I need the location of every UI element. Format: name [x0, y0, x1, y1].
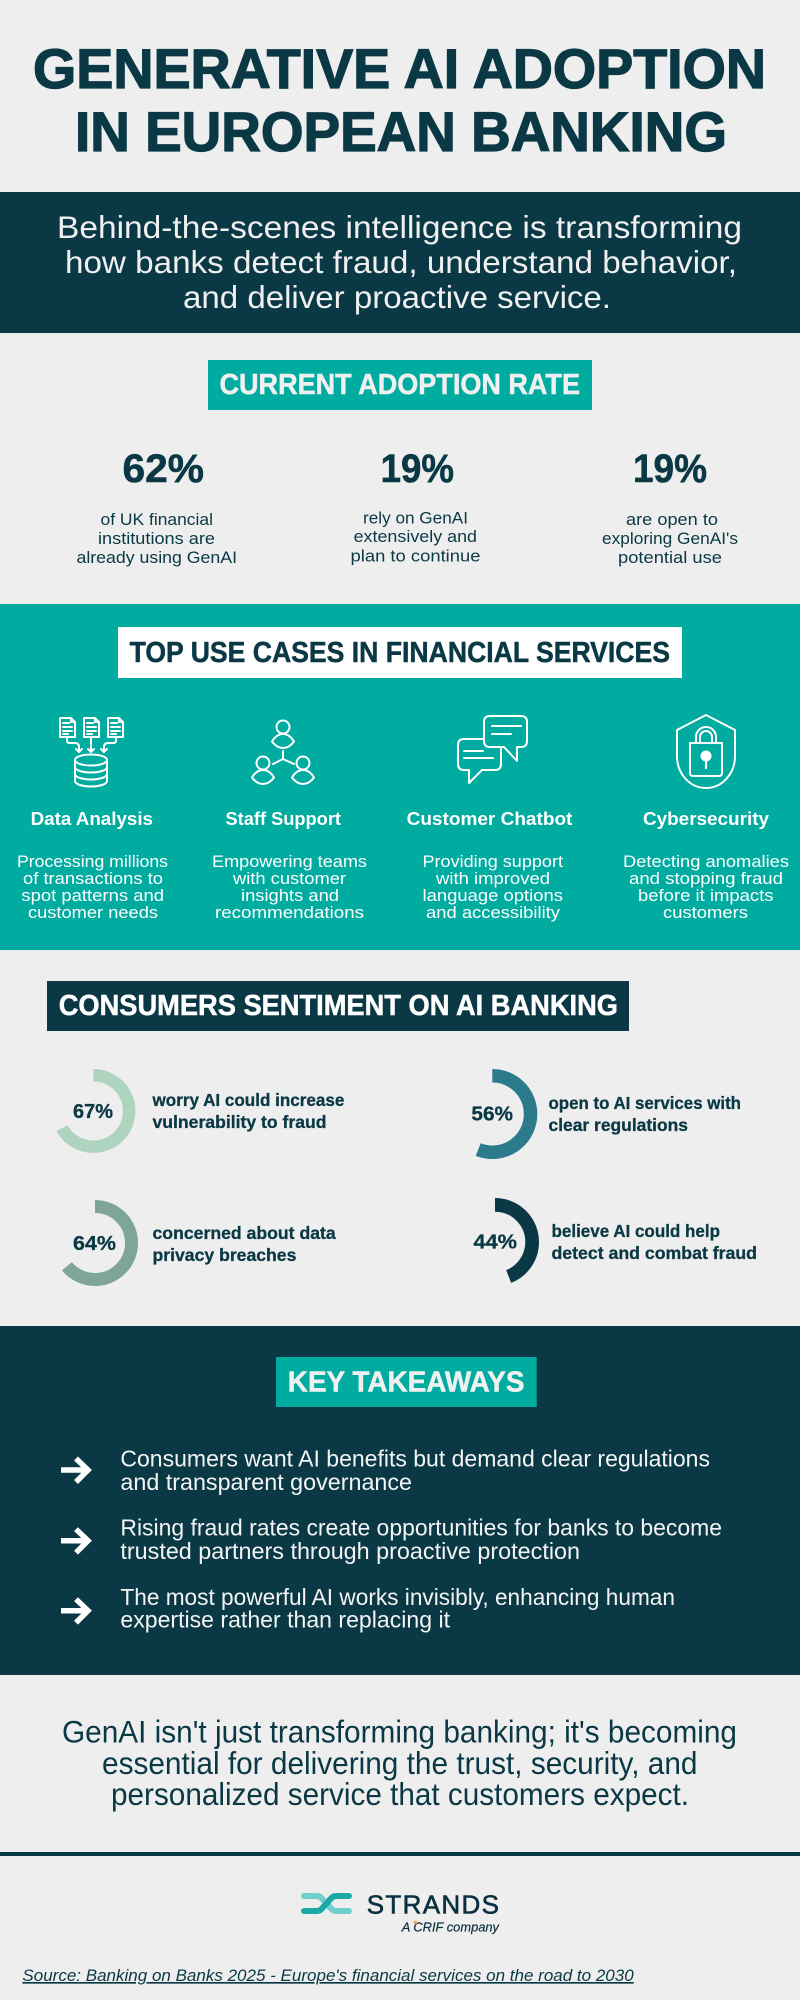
panel: consumer sentiment [47, 981, 757, 1280]
heading: consumers sentiment [47, 981, 629, 1031]
takeaway: fraud rates: trusted partners through proactive protection [120, 1538, 580, 1564]
stat: 19% open [602, 447, 738, 567]
closing statement: personalized service that customers expect. [111, 1776, 689, 1812]
use case: data analysis: customer needs [28, 903, 158, 922]
logo: Strands [304, 1889, 500, 1935]
donut: 64% privacy breaches [58, 1206, 336, 1280]
heading: key takeaways [276, 1357, 537, 1407]
takeaway: invisible AI: expertise rather than replacing it [120, 1607, 451, 1633]
panel: key takeaways [0, 1326, 800, 1675]
stat: 19% open: exploring GenAI's [602, 529, 738, 548]
stat: 62%: institutions are [98, 529, 215, 548]
takeaway: regulations [61, 1446, 710, 1495]
stat: 62% [76, 447, 237, 567]
stat: 19% rely: 19% [381, 447, 454, 491]
panel: intro band [0, 192, 800, 333]
donut: 67% fraud vulnerability: vulnerability to fraud [152, 1112, 326, 1132]
stat: 19% open: are open to [626, 510, 718, 529]
donut: 56% clear regulations: clear regulations [548, 1115, 688, 1135]
use case: data analysis [17, 809, 168, 922]
use case: data analysis: Data Analysis [31, 809, 153, 829]
donut: 44% detect fraud: 44% [474, 1231, 517, 1254]
stat: 19% rely: rely on GenAI [363, 508, 468, 528]
takeaway: invisible AI [61, 1584, 675, 1633]
use case: cybersecurity: Detecting anomalies [623, 852, 789, 871]
donut: 56% clear regulations: 56% [471, 1103, 513, 1126]
use case: data analysis: of transactions to [23, 869, 163, 888]
use case: data analysis: spot patterns and [21, 886, 164, 905]
use case: staff support: Empowering teams [212, 852, 367, 871]
donut: 44% detect fraud: believe AI could help [552, 1221, 720, 1241]
title [33, 37, 766, 163]
use case: cybersecurity: Cybersecurity [643, 809, 769, 829]
use case: staff support: with customer [232, 869, 346, 888]
donut: 44% detect fraud [458, 1205, 757, 1279]
stat: 19% rely [350, 447, 480, 565]
use case: customer chatbot: Providing support [422, 852, 563, 871]
icon: chat bubbles [458, 716, 527, 783]
heading: current adoption rate: CURRENT ADOPTION RATE [220, 369, 580, 401]
logo: Strands: STRANDS [367, 1889, 499, 1919]
use case: cybersecurity: customers [663, 903, 748, 922]
use case: staff support: Staff Support [226, 809, 341, 829]
closing statement [62, 1714, 737, 1812]
use case: staff support [212, 809, 367, 922]
panel: intro band: and deliver proactive service. [183, 279, 611, 315]
use case: customer chatbot: Customer Chatbot [407, 809, 572, 829]
takeaway: regulations: and transparent governance [120, 1469, 412, 1495]
logo: Strands: A CRIF company [401, 1920, 500, 1935]
use case: customer chatbot [407, 809, 572, 922]
donut: 64% privacy breaches: 64% [73, 1232, 116, 1255]
title: IN EUROPEAN BANKING [75, 100, 727, 163]
heading: top use cases [118, 627, 682, 678]
panel: intro band: Behind-the-scenes intelligence is transforming [57, 209, 742, 245]
donut: 67% fraud vulnerability: worry AI could increase [152, 1090, 345, 1110]
use case: cybersecurity: before it impacts [638, 886, 774, 905]
donut: 67% fraud vulnerability [58, 1075, 345, 1147]
use case: data analysis: Processing millions [17, 852, 168, 871]
use case: staff support: recommendations [215, 903, 364, 922]
use case: customer chatbot: and accessibility [426, 903, 561, 922]
use case: customer chatbot: language options [422, 886, 563, 905]
stat: 62%: of UK financial [100, 510, 213, 529]
heading: current adoption rate [208, 360, 592, 410]
takeaway: regulations: Consumers want AI benefits but demand clear regulations [120, 1446, 710, 1472]
donut: 64% privacy breaches: concerned about data [152, 1223, 336, 1243]
takeaway: invisible AI: The most powerful AI works invisibly, enhancing human [120, 1584, 675, 1610]
donut: 67% fraud vulnerability: 67% [73, 1101, 113, 1123]
donut: 56% clear regulations [454, 1076, 741, 1152]
panel: top use cases [0, 604, 800, 950]
use case: cybersecurity: and stopping fraud [629, 869, 783, 888]
use case: customer chatbot: with improved [435, 869, 550, 888]
takeaway: fraud rates [61, 1515, 722, 1564]
heading: consumers sentiment: CONSUMERS SENTIMENT ON AI BANKING [59, 990, 618, 1022]
source citation: Source: Banking on Banks 2025 - Europe's financial services on the road to 2030 [22, 1967, 635, 1985]
icon: documents into database [60, 718, 123, 786]
use case: cybersecurity [623, 809, 789, 922]
stat: 62%: 62% [122, 447, 204, 491]
donut: 64% privacy breaches: privacy breaches [152, 1245, 297, 1265]
stat: 19% rely: extensively and [354, 527, 477, 546]
closing statement: GenAI isn't just transforming banking; it's becoming [62, 1714, 737, 1750]
takeaway: fraud rates: Rising fraud rates create opportunities for banks to become [120, 1515, 722, 1541]
icon: staff network [252, 720, 314, 784]
closing statement: essential for delivering the trust, security, and [102, 1745, 698, 1781]
icon: shield with padlock [677, 715, 735, 788]
donut: 56% clear regulations: open to AI services with [548, 1093, 741, 1113]
heading: key takeaways: KEY TAKEAWAYS [288, 1367, 524, 1399]
stat: 19% open: 19% [633, 447, 707, 491]
panel: current adoption rate [76, 360, 738, 567]
stat: 19% open: potential use [618, 548, 722, 567]
title: GENERATIVE AI ADOPTION [33, 37, 766, 100]
donut: 44% detect fraud: detect and combat fraud [552, 1243, 757, 1263]
use case: staff support: insights and [241, 886, 339, 905]
heading: top use cases: TOP USE CASES IN FINANCIAL SERVICES [130, 637, 670, 669]
stat: 62%: already using GenAI [76, 548, 237, 567]
stat: 19% rely: plan to continue [350, 546, 480, 565]
panel: intro band: how banks detect fraud, understand behavior, [65, 244, 737, 280]
